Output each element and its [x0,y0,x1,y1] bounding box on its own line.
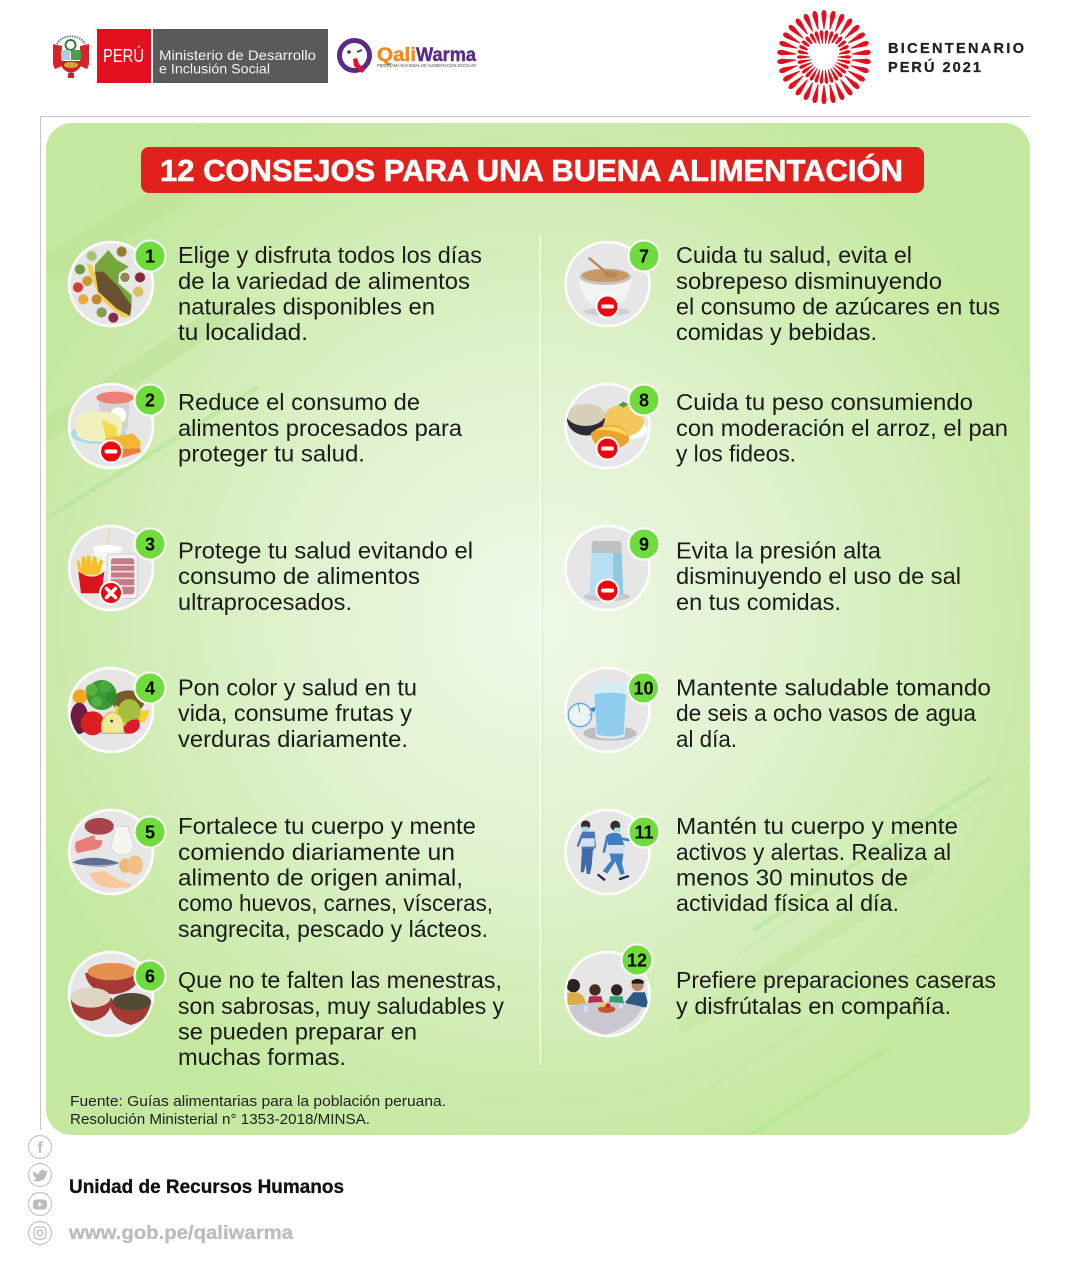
tip 4 [69,668,417,752]
text: consejo 7 [676,242,1000,345]
icon: familia a la mesa [566,952,650,1036]
tip 11 [566,810,958,916]
badge 8 [628,384,660,416]
text: consejo 12 [676,967,996,1019]
text: consejo 2: Reduce el consumo de [178,389,420,415]
badge 3 [134,528,166,560]
badge 1: 1 [145,246,155,266]
badge 5 [134,816,166,848]
text: consejo 8: con moderación el arroz, el pan [676,415,1008,441]
panel: fondo verde [46,123,1030,1135]
badge 9 [628,528,660,560]
badge 9: 9 [639,534,649,554]
tip 9 [566,526,961,615]
text: consejo 5 [178,813,493,942]
badge 4 [134,672,166,704]
text: consejo 3: consumo de alimentos [178,563,420,589]
text: consejo 10: al día. [676,726,737,752]
text: consejo 7: el consumo de azúcares en tus [676,294,1000,320]
icon: comida ultraprocesada [69,526,153,610]
badge 11 [628,816,660,848]
icon: facebook: f [37,1140,43,1157]
badge 6: 6 [145,966,155,986]
icon: personas caminando [566,810,650,894]
tip 6 [69,952,504,1070]
text: consejo 6: son sabrosas, muy saludables y [178,993,504,1019]
icon: tazón de azúcar [566,242,650,326]
logo text: Bicentenario Perú 2021 [888,41,1024,76]
text: consejo 2: alimentos procesados para [178,415,462,441]
heading banner: 12 CONSEJOS PARA UNA BUENA ALIMENTACIÓN [160,152,903,188]
text: consejo 11 [676,813,958,916]
tip 5 [69,810,493,942]
icon: facebook [28,1136,52,1158]
tip 2 [69,384,462,468]
logo: PERÚ Ministerio de Desarrollo e Inclusión Social: e Inclusión Social [159,60,270,76]
badge 10 [628,672,659,704]
text: consejo 9 [676,538,961,615]
icon: arroz, pan y fideos [566,384,650,468]
tip 1 [69,240,482,345]
badge 11: 11 [634,822,654,842]
text: consejo 2: proteger tu salud. [178,440,365,466]
tip 10 [566,668,991,752]
badge 4: 4 [145,678,155,698]
tip 12 [566,944,996,1036]
text: consejo 9: disminuyendo el uso de sal [676,563,961,589]
badge 12: 12 [627,950,647,970]
text: consejo 3 [178,538,473,615]
text: consejo 12: y disfrútalas en compañía. [676,993,951,1019]
logo: PERÚ Ministerio de Desarrollo e Inclusión Social: Ministerio de Desarrollo [159,47,316,63]
tip 7 [566,240,1000,345]
logo: sol del Bicentenario [765,2,883,112]
text: consejo 9: Evita la presión alta [676,538,881,564]
text: consejo 9: en tus comidas. [676,589,841,615]
logo text: Bicentenario Perú 2021: BICENTENARIO [888,41,1024,57]
source note: Fuente: Guías alimentarias para la población peruana. [70,1093,446,1110]
tip 8 [566,384,1008,468]
text: consejo 8: Cuida tu peso consumiendo [676,389,973,415]
text: consejo 6 [178,967,504,1070]
source note [70,1093,446,1128]
text: consejo 6: muchas formas. [178,1044,346,1070]
badge 2 [134,384,166,416]
text: consejo 11: actividad física al día. [676,890,899,916]
tip 3 [69,526,473,615]
badge 5: 5 [145,822,155,842]
text: consejo 4 [178,674,417,752]
text: consejo 4: vida, consume frutas y [178,700,412,726]
footer: web: www.gob.pe/qaliwarma [68,1223,293,1244]
text: consejo 5: alimento de origen animal, [178,864,463,890]
footer: unidad: Unidad de Recursos Humanos [69,1177,344,1198]
text: consejo 5: Fortalece tu cuerpo y mente [178,813,476,839]
badge 3: 3 [145,534,155,554]
icon: instagram [28,1222,52,1244]
logo: Qali Warma: Warma [416,45,476,66]
text: consejo 10 [676,674,991,752]
icon: vaso de agua y reloj [566,668,650,752]
badge 12 [622,944,652,976]
text: consejo 1: de la variedad de alimentos [178,268,470,294]
text: consejo 5: sangrecita, pescado y lácteos. [178,916,488,942]
text: consejo 7: sobrepeso disminuyendo [676,268,942,294]
text: consejo 1: tu localidad. [178,319,308,345]
source note: Resolución Ministerial n° 1353-2018/MINSA. [70,1111,370,1128]
text: consejo 3: ultraprocesados. [178,589,352,615]
text: consejo 6: se pueden preparar en [178,1018,417,1044]
text: consejo 11: menos 30 minutos de [676,864,908,890]
text: consejo 8: y los fideos. [676,440,796,466]
text: consejo 5: comiendo diariamente un [178,839,455,865]
text: consejo 5: como huevos, carnes, vísceras, [178,890,493,916]
text: consejo 1: naturales disponibles en [178,294,435,320]
text: consejo 4: Pon color y salud en tu [178,674,417,700]
text: consejo 12: Prefiere preparaciones caseras [676,967,996,993]
text: consejo 6: Que no te falten las menestras, [178,967,502,993]
text: consejo 11: Mantén tu cuerpo y mente [676,813,958,839]
icon: mapa del Perú con alimentos [69,242,153,326]
logo: Qali Warma: PROGRAMA NACIONAL DE ALIMENTACIÓN ESCOLAR [377,62,477,68]
badge 2: 2 [145,390,155,410]
badge 6 [134,960,166,992]
icon: lácteos y queso procesados [69,384,153,468]
badge 7: 7 [639,246,649,266]
badge 10: 10 [633,678,654,698]
icon: salero [566,526,650,610]
text: consejo 3: Protege tu salud evitando el [178,538,473,564]
logo: PERÚ Ministerio de Desarrollo e Inclusión Social: PERÚ [103,45,144,66]
text: consejo 7: Cuida tu salud, evita el [676,242,912,268]
text: consejo 4: verduras diariamente. [178,726,408,752]
icon: frutas y verduras [69,668,153,752]
text: consejo 1 [178,242,482,345]
text: consejo 2 [178,389,462,466]
badge 7 [628,240,660,272]
icon: menestras [69,952,153,1036]
logo: PERÚ Ministerio de Desarrollo e Inclusión Social [97,29,328,83]
icon: youtube [28,1192,52,1216]
text: consejo 8 [676,389,1008,466]
logo: escudo del Perú [53,36,89,78]
text: consejo 1: Elige y disfruta todos los días [178,242,482,268]
logo text: Bicentenario Perú 2021: PERÚ 2021 [888,58,981,76]
icon: alimentos de origen animal [69,810,153,894]
badge 1 [134,240,166,272]
logo: Qali Warma [340,40,477,73]
icon: twitter [28,1164,52,1186]
badge 8: 8 [639,390,649,410]
text: consejo 10: de seis a ocho vasos de agua [676,700,976,726]
text: consejo 10: Mantente saludable tomando [676,674,991,700]
text: consejo 11: activos y alertas. Realiza al [676,839,951,865]
logo: Qali Warma: Qali [377,45,416,66]
text: consejo 7: comidas y bebidas. [676,319,877,345]
